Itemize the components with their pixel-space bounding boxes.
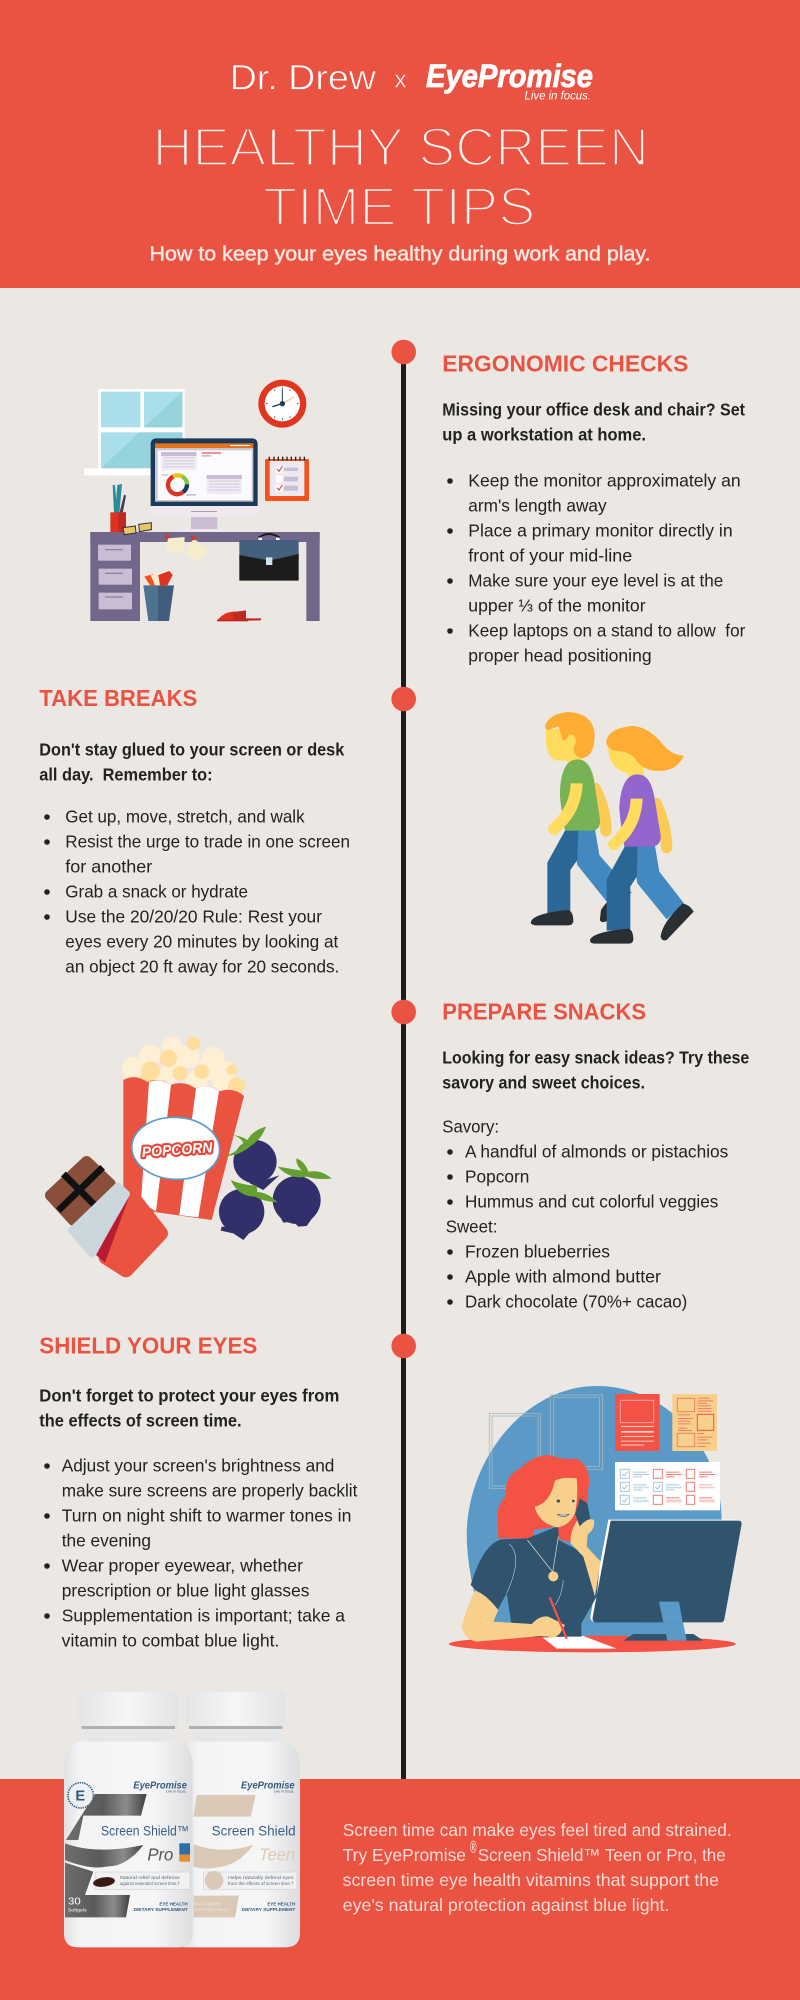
footer text: Screen time can make eyes feel tired and strained.	[343, 1820, 732, 1840]
snack list: Hummus and cut colorful veggies	[465, 1192, 719, 1212]
bullet list: the evening	[62, 1530, 151, 1550]
bottle: Screen Shield Teen: DIETARY SUPPLEMENT	[242, 1907, 295, 1912]
bullet list: Use the 20/20/20 Rule: Rest your	[65, 906, 322, 926]
footer text: Screen Shield™ Teen or Pro, the	[478, 1845, 726, 1865]
timeline spine	[401, 352, 406, 1782]
bullet list: vitamin to combat blue light.	[62, 1630, 279, 1650]
checklist	[615, 1462, 720, 1510]
bottle: Screen Shield Pro: Natural relief and defense	[120, 1875, 181, 1880]
footer text: ®	[470, 1837, 477, 1857]
bullet list: Keep laptops on a stand to allow for	[468, 621, 745, 641]
bullet list: for another	[65, 856, 152, 876]
desk top	[449, 1636, 736, 1652]
waste basket	[143, 571, 174, 621]
intro text: Don't stay glued to your screen or desk	[39, 739, 345, 759]
snack list	[442, 1117, 729, 1312]
popcorn box	[123, 1077, 244, 1220]
panel: ergonomic checks	[442, 351, 745, 666]
bottle: Screen Shield Teen: Helps naturally defend eyes	[228, 1875, 294, 1880]
bottle: Screen Shield Teen: EYE HEALTH	[267, 1901, 296, 1906]
intro text: savory and sweet choices.	[442, 1072, 645, 1092]
paper	[543, 1636, 617, 1649]
bottle: Screen Shield Teen	[183, 1692, 300, 1947]
wall clock	[258, 380, 306, 428]
snack list: Savory:	[442, 1117, 499, 1137]
bottle: Screen Shield Teen: ble Tablets	[194, 1901, 221, 1906]
footer banner	[0, 1779, 800, 2000]
heading: TAKE BREAKS	[39, 685, 197, 711]
bullet list: arm's length away	[468, 496, 607, 516]
wall calendar	[265, 457, 309, 501]
footer text: eye's natural protection against blue light.	[343, 1895, 669, 1915]
product bottles	[64, 1692, 300, 1947]
blue backdrop	[467, 1386, 722, 1637]
bullet list: Supplementation is important; take a	[62, 1605, 345, 1625]
snack list: Sweet:	[446, 1217, 497, 1237]
man	[531, 712, 632, 925]
window	[84, 389, 185, 475]
desk	[90, 532, 320, 621]
bottle: Screen Shield Teen: Live in focus.	[274, 1790, 294, 1794]
title: TIME TIPS	[263, 177, 536, 237]
intro text: the effects of screen time.	[39, 1410, 242, 1430]
heading: SHIELD YOUR EYES	[39, 1332, 257, 1358]
header banner	[0, 0, 800, 288]
bullet list: upper ⅓ of the monitor	[468, 596, 646, 616]
chocolate bar	[51, 1162, 161, 1270]
bottle: Screen Shield Teen: from the effects of screen time.†	[228, 1881, 294, 1886]
logo: EyePromise: EyePromise	[426, 58, 593, 94]
panel: take breaks	[39, 685, 350, 976]
timeline marker 4	[391, 1334, 416, 1358]
briefcase	[239, 534, 299, 581]
bullet list: Turn on night shift to warmer tones in	[62, 1505, 351, 1525]
footer text	[343, 1820, 732, 1915]
heading: ERGONOMIC CHECKS	[442, 351, 688, 377]
bottle: Screen Shield Pro: Screen Shield™	[101, 1822, 189, 1838]
bullet list: Wear proper eyewear, whether	[62, 1555, 303, 1575]
illustration: office desk	[84, 380, 320, 621]
timeline marker 3	[391, 1000, 416, 1024]
blueberries	[219, 1127, 332, 1240]
snack list: Apple with almond butter	[465, 1267, 661, 1287]
bullet list	[44, 1455, 358, 1650]
intro text: Missing your office desk and chair? Set	[442, 399, 745, 419]
bottle: Screen Shield Pro: Pro	[147, 1845, 173, 1865]
title: HEALTHY SCREEN	[152, 118, 649, 178]
timeline marker 1	[391, 340, 416, 364]
co-brand: x: x	[394, 66, 407, 93]
intro text	[39, 1385, 339, 1430]
intro text: Don't forget to protect your eyes from	[39, 1385, 339, 1405]
bullet list: Get up, move, stretch, and walk	[65, 806, 305, 826]
bottle: Screen Shield Pro: 30	[68, 1896, 81, 1907]
illustration: snacks	[51, 1037, 332, 1270]
bottle: Screen Shield Teen: Teen	[259, 1845, 295, 1865]
slippers	[217, 610, 261, 621]
bullet list: Place a primary monitor directly in	[468, 521, 733, 541]
bottle: Screen Shield Pro: against extended screen time.†	[120, 1881, 181, 1886]
desk drawers	[98, 545, 132, 609]
bullet list: front of your mid-line	[468, 546, 632, 566]
snack list: Dark chocolate (70%+ cacao)	[465, 1292, 687, 1312]
bottle: Screen Shield Teen: EyePromise	[241, 1780, 295, 1791]
donut chart	[168, 475, 187, 494]
bullet list	[44, 806, 350, 976]
subtitle: How to keep your eyes healthy during work and play.	[150, 243, 650, 266]
snack list: Popcorn	[465, 1167, 529, 1187]
illustration: two people walking	[531, 712, 694, 944]
intro text	[39, 739, 345, 784]
bottle: Screen Shield Pro: E	[75, 1789, 85, 1805]
title	[152, 118, 649, 237]
pencil cup	[110, 484, 126, 532]
bullet list: Grab a snack or hydrate	[65, 881, 248, 901]
bullet list: eyes every 20 minutes by looking at	[65, 931, 338, 951]
snack list: Frozen blueberries	[465, 1242, 610, 1262]
glasses	[123, 523, 151, 535]
bottle: Screen Shield Pro: EYE HEALTH	[159, 1901, 188, 1906]
computer screen	[590, 1520, 742, 1641]
panel: prepare snacks	[442, 998, 750, 1312]
bullet list: prescription or blue light glasses	[62, 1580, 310, 1600]
co-brand: Dr. Drew: Dr. Drew	[230, 58, 377, 97]
bullet list	[447, 471, 745, 666]
bottle: Screen Shield Teen: Screen Shield	[212, 1822, 296, 1838]
red document	[615, 1394, 660, 1451]
intro text: all day. Remember to:	[39, 764, 213, 784]
bottle: Screen Shield Pro: DIETARY SUPPLEMENT	[134, 1907, 188, 1912]
bottle: Screen Shield Pro: EyePromise	[133, 1780, 188, 1791]
illustration: woman at computer	[449, 1386, 742, 1652]
yellow document	[672, 1394, 717, 1451]
bottle: Screen Shield Pro: Softgels	[68, 1907, 87, 1912]
bullet list: Resist the urge to trade in one screen	[65, 831, 350, 851]
popcorn box: POPCORN	[141, 1140, 213, 1161]
bottle: Screen Shield Teen: ural Peach Flavor	[194, 1907, 228, 1912]
sticky notes	[165, 534, 209, 561]
intro text: Looking for easy snack ideas? Try these	[442, 1047, 750, 1067]
intro text	[442, 399, 745, 444]
woman	[590, 726, 694, 944]
bullet list: an object 20 ft away for 20 seconds.	[65, 956, 339, 976]
intro text: up a workstation at home.	[442, 424, 646, 444]
computer monitor	[151, 438, 258, 532]
heading: PREPARE SNACKS	[442, 998, 646, 1024]
bullet list: proper head positioning	[468, 646, 652, 666]
snack list: A handful of almonds or pistachios	[465, 1142, 729, 1162]
bullet list: make sure screens are properly backlit	[62, 1480, 358, 1500]
bottle: Screen Shield Pro: Live in focus.	[166, 1790, 187, 1794]
bullet list: Make sure your eye level is at the	[468, 571, 723, 591]
panel: shield your eyes	[39, 1332, 358, 1650]
logo: EyePromise: Live in focus.	[524, 90, 591, 102]
wall frames	[489, 1395, 603, 1488]
footer text: screen time eye health vitamins that support the	[343, 1870, 719, 1890]
bullet list: Keep the monitor approximately an	[468, 471, 741, 491]
bullet list: Adjust your screen's brightness and	[62, 1455, 334, 1475]
timeline marker 2	[391, 687, 416, 711]
bottle: Screen Shield Pro	[64, 1692, 193, 1947]
woman on phone	[462, 1455, 601, 1642]
footer text: Try EyePromise	[343, 1845, 466, 1865]
intro text	[442, 1047, 750, 1092]
popcorn kernels	[122, 1037, 245, 1095]
